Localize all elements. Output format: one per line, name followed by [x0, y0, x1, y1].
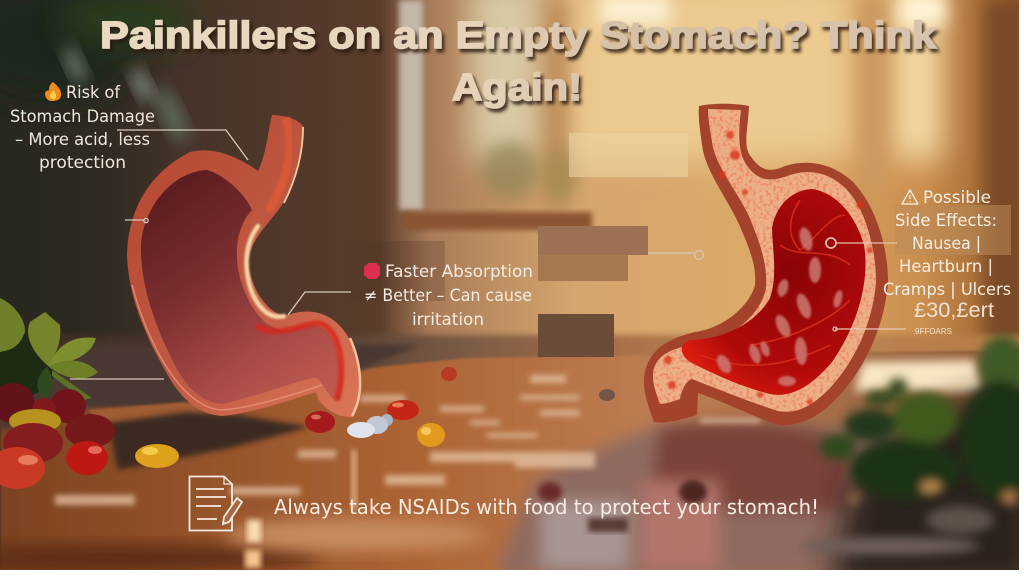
icon: document and pencil — [190, 476, 242, 530]
garbled artifact text: £30,£ert — [914, 299, 994, 322]
callout: possible side effects: Cramps | Ulcers — [883, 280, 1011, 299]
red inner band — [256, 323, 341, 400]
lit rim — [247, 226, 284, 317]
callout: faster absorption: ≠ Better – Can cause — [364, 286, 532, 305]
background: table surface — [0, 335, 1024, 576]
dark plant upper left — [0, 0, 140, 100]
bright reflections — [247, 520, 261, 542]
callout: possible side effects: Possible — [923, 188, 991, 207]
callout: faster absorption: irritation — [412, 310, 484, 329]
reflection on the table — [495, 428, 1024, 576]
stomach: cross-section (right) — [644, 104, 888, 425]
callout: possible side effects: Side Effects: — [895, 211, 997, 230]
title — [100, 15, 937, 109]
window plants — [482, 142, 538, 198]
icon: red stop sign — [364, 263, 380, 279]
mucosal folds — [714, 226, 844, 386]
blurred plant (right) — [800, 335, 1024, 576]
callout: risk of stomach damage: Risk of — [66, 83, 121, 102]
title: Painkillers on an Empty Stomach? Think — [100, 15, 937, 57]
stomach: plain anatomy (left) — [127, 115, 361, 417]
orange strip behind the stomach — [88, 402, 250, 424]
callout: risk of stomach damage: protection — [39, 153, 126, 172]
pills on the table — [135, 367, 707, 532]
tip: take with food: Always take NSAIDs with food to protect your stomach! — [274, 495, 819, 519]
garbled artifact text — [914, 299, 994, 336]
icon: warning triangle — [902, 190, 918, 204]
bright floor band — [855, 360, 985, 392]
icon: flame — [45, 82, 61, 101]
speckled tissue layer — [653, 109, 876, 412]
callout: possible side effects — [883, 188, 1011, 299]
berries and leaves (left) — [0, 298, 115, 489]
callout: possible side effects: Nausea | — [912, 234, 981, 253]
stomach cavity — [141, 170, 342, 404]
callout: risk of stomach damage: Stomach Damage — [10, 107, 155, 126]
garbled artifact text: 9FFOARS — [915, 327, 952, 336]
callout: faster absorption — [364, 262, 533, 329]
stomach shadow — [108, 412, 310, 470]
title: Again! — [452, 67, 582, 109]
callout: faster absorption: Faster Absorption — [385, 262, 533, 281]
callout: risk of stomach damage: – More acid, less — [15, 130, 150, 149]
red lumen — [682, 189, 866, 395]
pale table flecks — [55, 375, 760, 505]
blood spots in tissue — [664, 131, 873, 405]
painted-over label patches — [350, 133, 1011, 357]
callout: possible side effects: Heartburn | — [899, 257, 993, 276]
callout: risk of stomach damage — [10, 82, 155, 172]
leader lines — [70, 130, 906, 379]
